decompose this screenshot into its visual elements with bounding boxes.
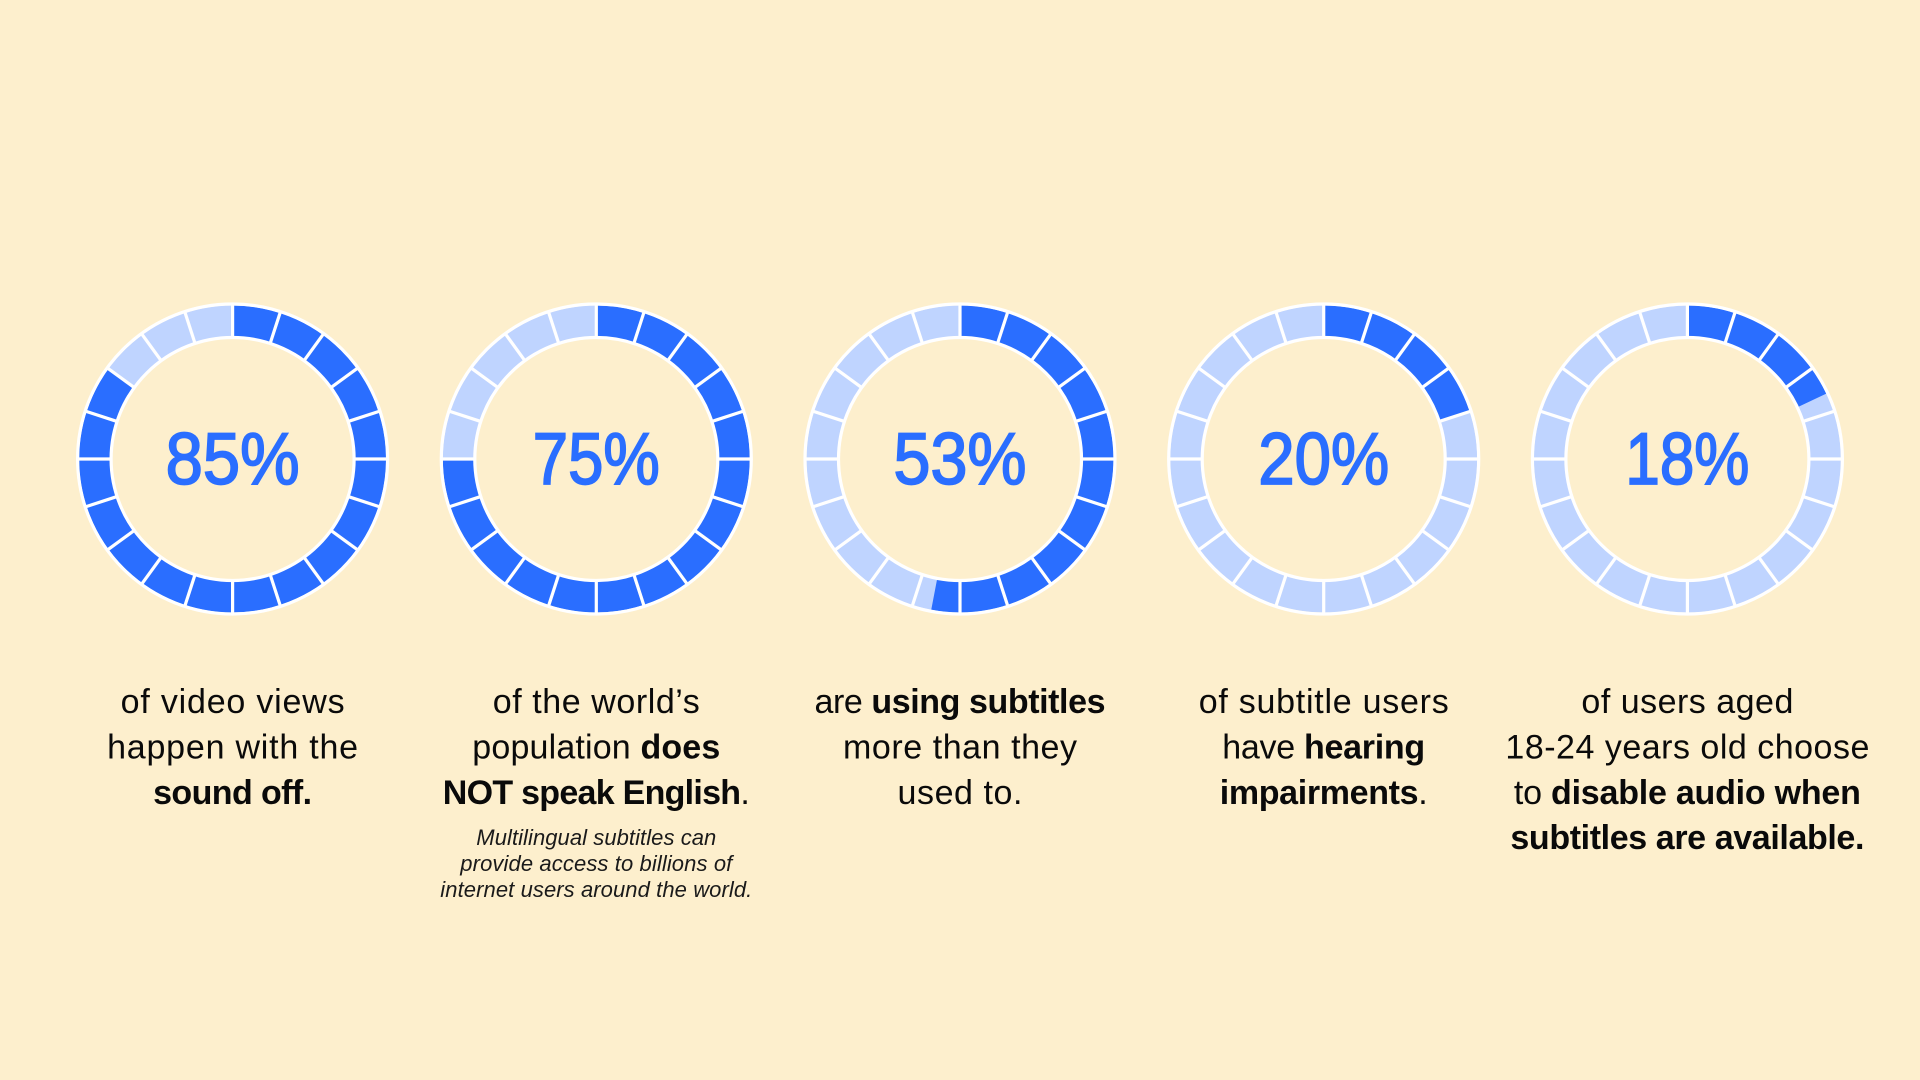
caption: using subtitles: are using subtitles (814, 683, 1106, 721)
caption: does not speak English: population does (472, 728, 720, 766)
percentage: 20%: 20% (1258, 419, 1389, 500)
panel: 20% hearing impairments (1169, 304, 1479, 812)
caption: disable audio: to disable audio when (1514, 774, 1861, 812)
panel: 85% sound off (78, 304, 388, 812)
caption: hearing impairments: of subtitle users (1199, 683, 1449, 721)
caption: sound off: happen with the (107, 728, 358, 766)
percentage: 53%: 53% (894, 419, 1026, 500)
percentage: 75%: 75% (533, 419, 660, 500)
caption: hearing impairments (1199, 683, 1449, 812)
donut chart: 53% (805, 304, 1115, 614)
caption: hearing impairments: impairments. (1220, 774, 1428, 812)
caption: disable audio (1505, 683, 1869, 857)
caption: does not speak English: NOT speak English. (443, 774, 750, 812)
caption: disable audio: of users aged (1581, 683, 1793, 721)
note: multilingual subtitles: internet users around the world. (440, 877, 752, 902)
note: multilingual subtitles: provide access to billions of (459, 851, 735, 876)
panel: 18% disable audio (1505, 304, 1869, 857)
caption: hearing impairments: have hearing (1222, 728, 1425, 766)
caption: disable audio: 18-24 years old choose (1505, 728, 1869, 766)
caption: does not speak English (443, 683, 750, 812)
caption: using subtitles: used to. (898, 774, 1022, 812)
caption: does not speak English: of the world’s (493, 683, 700, 721)
caption: disable audio: subtitles are available. (1510, 819, 1864, 857)
panel: 75% not English (440, 304, 752, 902)
caption: sound off (107, 683, 358, 812)
percentage: 18%: 18% (1625, 419, 1749, 500)
note: multilingual subtitles (440, 825, 752, 902)
caption: sound off: sound off. (153, 774, 312, 812)
percentage: 85%: 85% (166, 419, 300, 500)
note: multilingual subtitles: Multilingual subtitles can (476, 825, 716, 850)
donut chart: 85% (78, 304, 388, 614)
caption: using subtitles: more than they (843, 728, 1077, 766)
donut chart: 75% (441, 304, 751, 614)
caption: using subtitles (814, 683, 1106, 812)
panel: 53% using subtitles (805, 304, 1115, 812)
donut chart: 18% (1532, 304, 1842, 614)
caption: sound off: of video views (121, 683, 345, 721)
donut chart: 20% (1169, 304, 1479, 614)
